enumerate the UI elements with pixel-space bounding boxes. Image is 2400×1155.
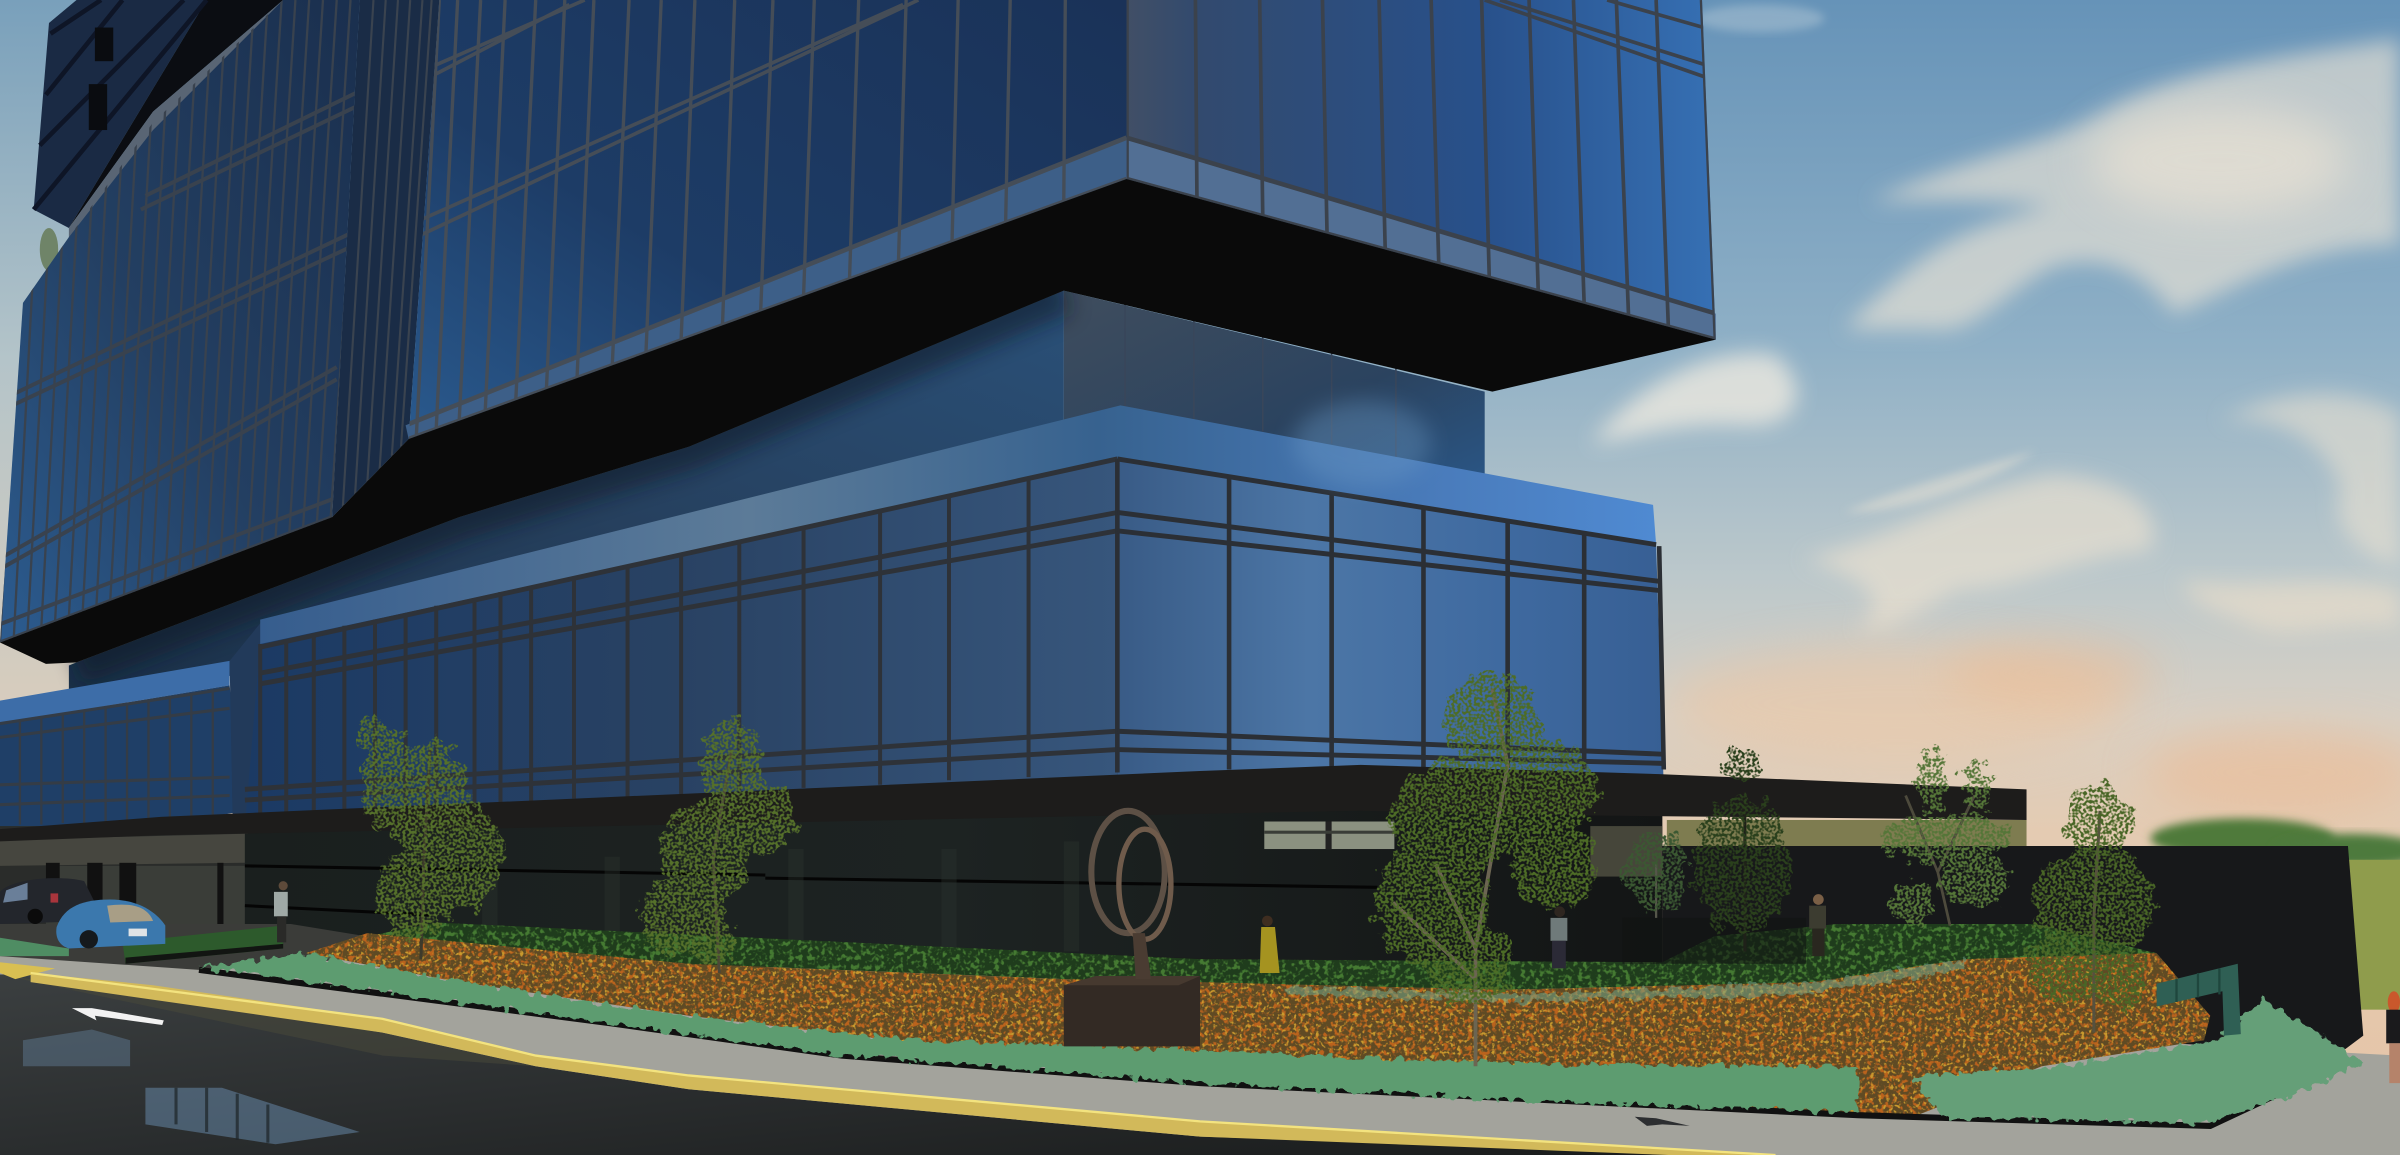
ground floor dark wall: [245, 809, 1662, 964]
shadow of bird on sidewalk: [1635, 1117, 1690, 1126]
courtyard tree right: [1880, 750, 2008, 926]
ground floor window: [1264, 822, 1662, 877]
faint tree behind glass: [1626, 829, 1687, 918]
tower main left glazing: [406, 0, 1127, 439]
person: man walking: [1809, 894, 1826, 956]
yellow curb: [0, 962, 1776, 1155]
glass balustrade: [260, 405, 1656, 647]
large foreground tree: [1373, 673, 1598, 1066]
wildflower bed: [306, 933, 2210, 1117]
garden tree at far right: [2027, 782, 2155, 1033]
green utility box: [2157, 964, 2241, 1036]
podium left glazing: [245, 459, 1117, 826]
tower left facade: [0, 0, 364, 643]
black garden wall: [1662, 846, 2363, 1086]
car: blue sedan: [56, 900, 165, 948]
person: woman in yellow: [1260, 916, 1280, 973]
small tree behind tower: [40, 228, 58, 271]
far left podium wing: [0, 620, 263, 835]
wet asphalt road: [0, 974, 1776, 1155]
sculpture on pedestal: [1064, 811, 1200, 1046]
sidewalk and driveway: [0, 924, 2400, 1155]
pedestrians: [274, 881, 2400, 1083]
person: figure in grey: [1551, 906, 1567, 968]
grass planting: [367, 918, 2157, 990]
dark base behind lower floors: [245, 765, 1662, 967]
clouds: [1592, 5, 2400, 815]
concrete canopy slab: [0, 765, 2027, 841]
porte cochere under podium: [0, 826, 248, 933]
road puddle reflections: [23, 1030, 360, 1144]
black soffit under cantilever: [0, 179, 1716, 664]
dark courtyard tree: [1693, 747, 1791, 952]
tower narrow corner strip: [332, 0, 439, 517]
person: woman at right edge: [2386, 991, 2400, 1083]
podium right glazing: [1117, 401, 1664, 788]
car: dark suv: [0, 878, 95, 924]
recessed mid-level wall: [69, 291, 1485, 704]
distant tree line: [1667, 818, 2400, 1010]
black planter edge: [199, 970, 2311, 1126]
person: man near canopy: [274, 881, 288, 942]
small planter boxes: [0, 926, 283, 964]
road arrow marking: [72, 1008, 164, 1025]
cars: [0, 878, 165, 948]
tower main right glazing: [1127, 0, 1716, 340]
tree left two: [638, 719, 796, 973]
upper tower block: [34, 0, 306, 245]
tree left one: [358, 710, 502, 959]
low green hedge border: [199, 953, 2363, 1123]
